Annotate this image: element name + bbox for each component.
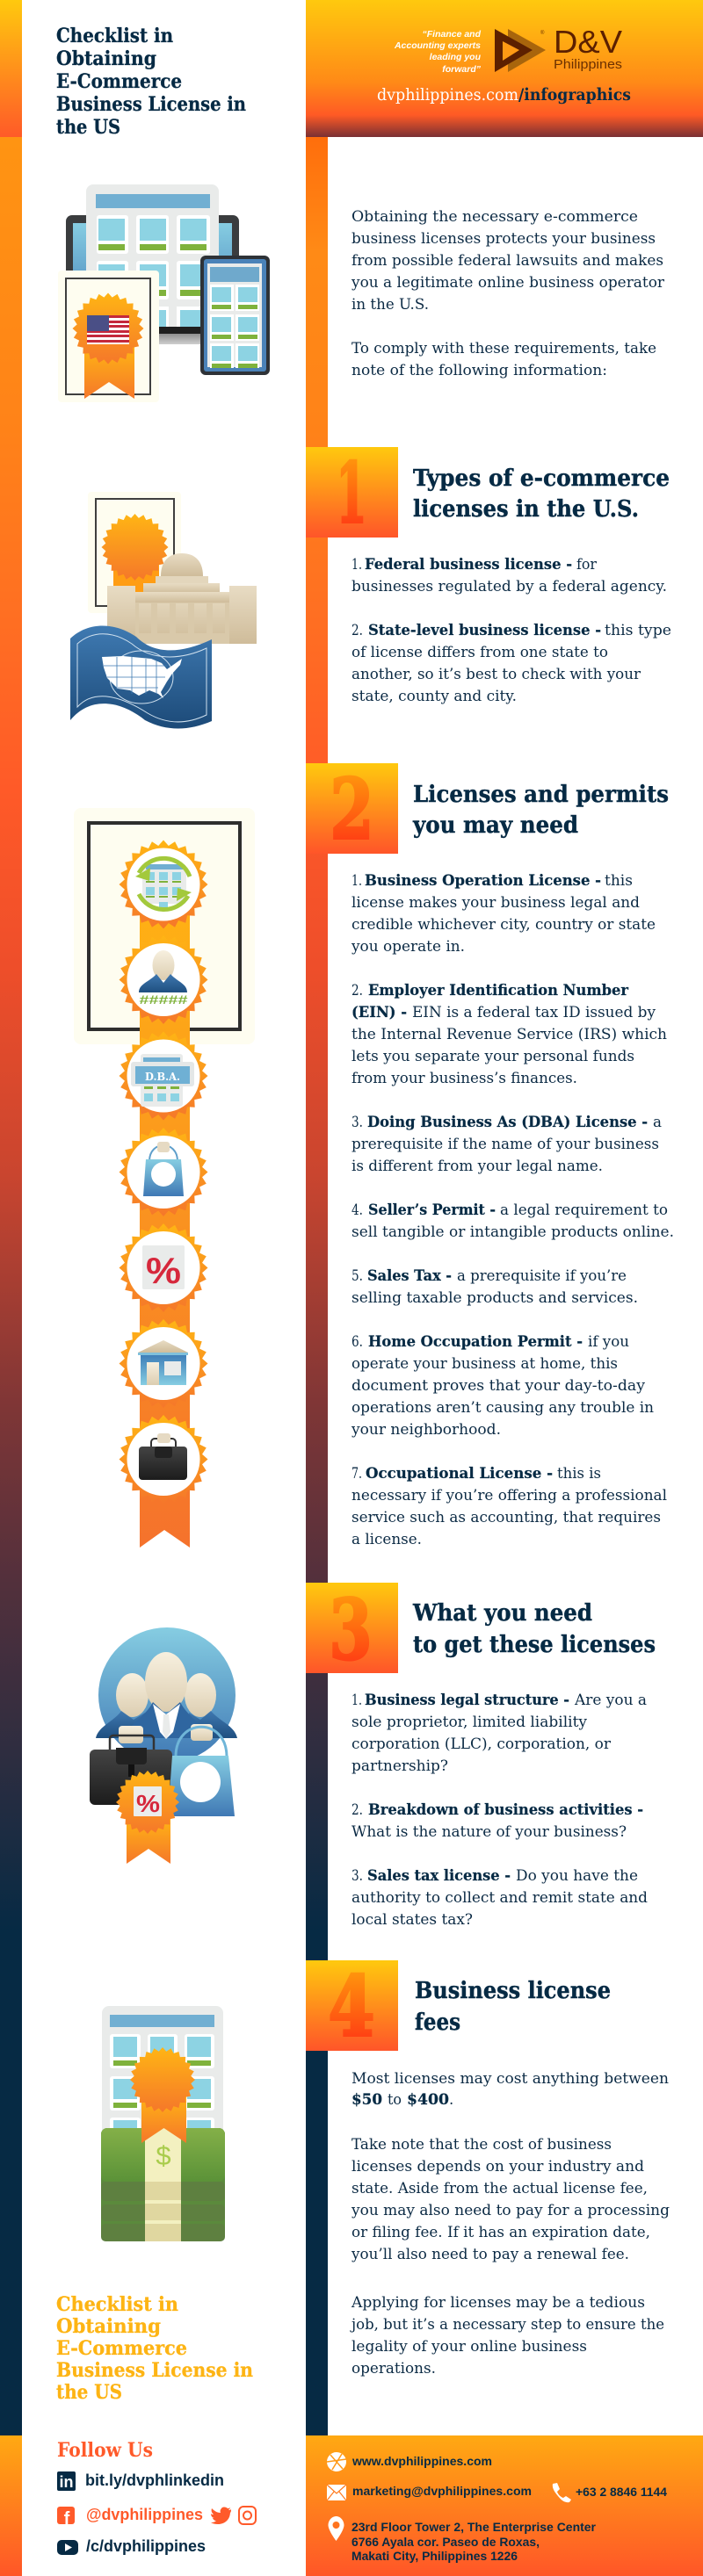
address: Makati City, Philippines 1226 xyxy=(352,2550,518,2563)
section 4 text xyxy=(350,2070,670,2377)
section 4 text: . xyxy=(449,2091,453,2108)
section 2 text: 3. xyxy=(352,1114,363,1130)
seal: doing business as xyxy=(120,1031,207,1121)
section 4 text: licenses depends on your industry and xyxy=(352,2158,644,2175)
logo mark xyxy=(495,29,546,72)
side persons xyxy=(96,1673,237,1738)
section 4 text: state. Aside from the actual license fee, xyxy=(352,2180,648,2197)
section 3 text: What is the nature of your business? xyxy=(352,1823,627,1840)
center vertical gradient bar xyxy=(306,137,328,2435)
icon: linkedin: in xyxy=(60,2473,74,2491)
heading 3 xyxy=(412,1600,656,1658)
number badge 4 xyxy=(306,1959,398,2055)
intro text: in the U.S. xyxy=(352,296,429,313)
capitol building xyxy=(107,553,257,644)
discount seal xyxy=(116,1771,179,1864)
intro text: business licenses protects your business xyxy=(352,230,656,247)
section 2 text: from your business’s finances. xyxy=(352,1070,577,1086)
section 2 text: this xyxy=(605,872,633,889)
tagline: “Finance and xyxy=(422,29,482,40)
logo wordmark: Philippines xyxy=(554,57,622,72)
money stack: $ xyxy=(156,2140,171,2171)
section 4 text: Take note that the cost of business xyxy=(352,2136,612,2153)
section 2 text: the Internal Revenue Service (IRS) which xyxy=(352,1026,667,1043)
section 3 text xyxy=(352,1692,648,1928)
heading 1 xyxy=(413,465,670,523)
intro text: note of the following information: xyxy=(352,362,607,379)
section 2 text: selling taxable products and services. xyxy=(352,1289,638,1306)
footer contact panel xyxy=(306,2435,703,2576)
section 2 text: document proves that your day-to-day xyxy=(352,1377,646,1394)
section 1 text: this type xyxy=(605,622,671,639)
icon: mail xyxy=(327,2485,346,2500)
section 2 text: 7. xyxy=(352,1465,362,1482)
section 2 text xyxy=(351,872,674,1548)
title: the US xyxy=(56,116,120,139)
blue backdrop xyxy=(98,1627,236,1763)
section 2 text: license makes your business legal and xyxy=(352,894,640,911)
section 3 text: authority to collect and remit state and xyxy=(352,1889,648,1906)
section 2 text: a legal requirement to xyxy=(500,1201,668,1218)
section 2 text: sell tangible or intangible products online. xyxy=(352,1223,674,1240)
illustration: license page, seal and money xyxy=(101,2006,225,2241)
section 4 text: legality of your online business xyxy=(352,2338,587,2355)
section 4 text: operations. xyxy=(352,2360,436,2377)
number badge 1: 1 xyxy=(336,444,367,543)
section 4 text: you may also need to pay for a processing xyxy=(351,2202,670,2219)
section 2 text: Seller’s Permit - xyxy=(368,1201,496,1218)
tablet page xyxy=(86,184,219,327)
icon: linkedin xyxy=(57,2471,76,2491)
section 2 text: Home Occupation Permit - xyxy=(368,1333,583,1350)
money stack xyxy=(101,2128,225,2241)
seal: sales tax: % xyxy=(146,1250,181,1291)
section 4 text: $50 xyxy=(352,2091,382,2108)
icon: location pin xyxy=(329,2516,344,2541)
seal: occupational license xyxy=(120,1415,207,1504)
heading 1: Types of e-commerce xyxy=(413,465,670,492)
closing title: E-Commerce xyxy=(56,2337,187,2360)
section 1 text: Federal business license - xyxy=(365,556,572,573)
section 2 text: necessary if you’re offering a professional xyxy=(352,1487,667,1504)
laptop xyxy=(66,215,239,344)
social handle: @dvphilippines xyxy=(86,2506,203,2523)
tagline: forward” xyxy=(442,64,482,75)
section 2 text: operate your business at home, this xyxy=(352,1355,618,1372)
seal: doing business as: D.B.A. xyxy=(145,1071,180,1083)
section 1 text xyxy=(352,556,671,704)
illustration: ribbon with seven license seals xyxy=(120,840,207,1548)
number badge 2 xyxy=(306,761,398,859)
certificate with flag seal xyxy=(58,271,159,402)
section 3 text: Sales tax license - xyxy=(367,1867,511,1884)
section 1 text: businesses regulated by a federal agency. xyxy=(352,578,667,595)
section 3 text: Breakdown of business activities - xyxy=(368,1801,643,1818)
section 3 text: corporation (LLC), corporation, or xyxy=(352,1735,611,1752)
section 1 text: 2. xyxy=(352,622,363,639)
section 1 text: another, so it’s best to check with your xyxy=(352,666,641,682)
section 2 text: Employer Identification Number xyxy=(368,982,628,999)
illustration: certificate, capitol and US flag xyxy=(70,492,257,729)
ribbon xyxy=(140,913,190,1548)
discount seal: % xyxy=(136,1790,160,1817)
number badge 3: 3 xyxy=(329,1581,373,1679)
icon: youtube xyxy=(57,2540,78,2555)
section 3 text: Are you a xyxy=(574,1692,647,1708)
section 2 text: Occupational License - xyxy=(366,1465,553,1482)
section 2 text: a prerequisite if you’re xyxy=(457,1267,627,1284)
address: 6766 Ayala cor. Paseo de Roxas, xyxy=(352,2536,540,2549)
heading 4 xyxy=(415,1978,611,2036)
seal: sales tax xyxy=(120,1223,207,1312)
logo wordmark xyxy=(540,24,622,72)
section 2 text: 6. xyxy=(352,1333,363,1350)
section 1 text: state, county and city. xyxy=(352,688,517,704)
illustration: laptop, tablet, phone and certificate xyxy=(58,184,270,402)
section 2 text: lets you separate your personal funds xyxy=(352,1048,634,1064)
certificate with seal xyxy=(88,492,181,613)
linkedin handle: bit.ly/dvphlinkedin xyxy=(85,2471,224,2489)
logo wordmark: ® xyxy=(540,30,545,36)
heading 2 xyxy=(412,782,669,839)
website url: /infographics xyxy=(518,85,631,105)
footer left strip xyxy=(0,2435,22,2576)
left header strip xyxy=(0,0,22,137)
section 2 text: 2. xyxy=(352,982,363,999)
icon: globe xyxy=(327,2452,346,2471)
closing title xyxy=(56,2293,253,2404)
title: Checklist in xyxy=(56,25,173,47)
title: E-Commerce xyxy=(56,70,182,93)
tagline: Accounting experts xyxy=(394,40,481,51)
illustration: framed certificate xyxy=(74,808,255,1044)
section 2 text: credible whichever city, country or state xyxy=(352,916,656,933)
icon: twitter xyxy=(211,2507,231,2524)
section 2 text: a license. xyxy=(352,1531,422,1548)
heading 4: fees xyxy=(415,2010,460,2036)
number badge 1 xyxy=(306,444,398,543)
section 1 text: 1. xyxy=(352,556,362,573)
section 2 text: EIN is a federal tax ID issued by xyxy=(412,1004,656,1021)
heading 1: licenses in the U.S. xyxy=(413,496,639,523)
section 3 text: local states tax? xyxy=(352,1911,473,1928)
section 2 text: (EIN) - xyxy=(352,1004,407,1021)
heading 2: Licenses and permits xyxy=(413,782,669,808)
briefcase xyxy=(90,1735,172,1805)
left vertical gradient bar xyxy=(0,137,22,2435)
intro text xyxy=(351,208,664,379)
address xyxy=(352,2521,597,2563)
intro text: Obtaining the necessary e-commerce xyxy=(352,208,638,225)
section 3 text: 3. xyxy=(352,1867,363,1884)
title xyxy=(56,25,246,139)
heading 2: you may need xyxy=(412,812,578,839)
hands xyxy=(119,1724,213,1743)
intro text: from possible federal lawsuits and makes xyxy=(352,252,663,269)
follow us block xyxy=(57,2439,256,2555)
seal: business operation license xyxy=(120,840,207,929)
logo wordmark: D&V xyxy=(554,24,622,60)
tagline xyxy=(394,29,482,75)
section 4 text: Most licenses may cost anything between xyxy=(352,2070,669,2087)
heading 3: What you need xyxy=(412,1600,592,1627)
section 3 text: sole proprietor, limited liability xyxy=(352,1714,588,1730)
section 3 text: 2. xyxy=(352,1801,363,1818)
section 3 text: partnership? xyxy=(352,1757,448,1774)
closing title: the US xyxy=(56,2381,122,2404)
address: 23rd Floor Tower 2, The Enterprise Center xyxy=(352,2521,597,2534)
section 4 text: you’ll also need to pay a renewal fee. xyxy=(351,2246,629,2262)
section 2 text: service such as accounting, that requires xyxy=(352,1509,661,1526)
email: marketing@dvphilippines.com xyxy=(352,2485,532,2498)
seal: employer identification number xyxy=(120,935,207,1024)
heading 3: to get these licenses xyxy=(413,1632,656,1658)
website: www.dvphilippines.com xyxy=(352,2455,492,2468)
section 2 text: you operate in. xyxy=(351,938,465,955)
phone number: +63 2 8846 1144 xyxy=(576,2486,668,2499)
section 3 text: Business legal structure - xyxy=(365,1692,569,1708)
section 2 text: prerequisite if the name of your business xyxy=(352,1136,659,1152)
website url: dvphilippines.com xyxy=(377,85,518,105)
section 4 text: job, but it’s a necessary step to ensure the xyxy=(350,2316,664,2333)
section 2 text: 5. xyxy=(352,1267,363,1284)
section 4 text: or filing fee. If it has an expiration date, xyxy=(352,2224,650,2240)
shopping bag xyxy=(168,1727,235,1816)
number badge 3 xyxy=(306,1581,398,1679)
intro text: you a legitimate online business operator xyxy=(351,274,664,291)
section 2 text: a xyxy=(653,1114,662,1130)
icon: phone xyxy=(553,2483,571,2502)
phone xyxy=(200,256,270,375)
center person xyxy=(123,1652,209,1739)
section 2 text: operations aren’t causing any trouble in xyxy=(352,1399,654,1416)
seal: home occupation permit xyxy=(120,1319,207,1408)
section 1 text: of license differs from one state to xyxy=(352,644,608,660)
title: Business License in xyxy=(56,93,246,116)
license page xyxy=(102,2006,223,2134)
section 3 text: 1. xyxy=(352,1692,362,1708)
heading 4: Business license xyxy=(415,1978,611,2004)
section 1 text: for xyxy=(576,556,597,573)
section 4 text: to xyxy=(388,2091,402,2108)
section 1 text: State-level business license - xyxy=(368,622,601,639)
icon: facebook: f xyxy=(64,2509,70,2529)
illustration: business team with briefcase, bag and seal xyxy=(90,1627,237,1864)
section 3 text: Do you have the xyxy=(516,1867,638,1884)
section 2 text: Sales Tax - xyxy=(367,1267,452,1284)
section 2 text: 1. xyxy=(352,872,362,889)
follow us heading: Follow Us xyxy=(57,2439,153,2462)
closing title: Business License in xyxy=(56,2359,253,2382)
closing title: Checklist in xyxy=(56,2293,178,2316)
section 2 text: is different from your legal name. xyxy=(352,1158,603,1174)
ribbon and seal xyxy=(130,2047,195,2143)
section 2 text: this is xyxy=(557,1465,601,1482)
section 2 text: Business Operation License - xyxy=(365,872,601,889)
website url xyxy=(377,85,631,105)
header banner with logo xyxy=(306,0,703,137)
number badge 4: 4 xyxy=(329,1959,374,2055)
title: Obtaining xyxy=(56,47,156,70)
section 4 text: Applying for licenses may be a tedious xyxy=(351,2294,645,2311)
section 4 text: $400 xyxy=(407,2091,449,2108)
icon: instagram xyxy=(239,2507,256,2524)
intro text: To comply with these requirements, take xyxy=(352,340,656,357)
seal: employer identification number: ##### xyxy=(139,992,188,1007)
section 2 text: Doing Business As (DBA) License - xyxy=(367,1114,648,1130)
section 2 text: your neighborhood. xyxy=(351,1421,501,1438)
closing title: Obtaining xyxy=(56,2315,161,2338)
tagline: leading you xyxy=(430,52,482,62)
section 2 text: 4. xyxy=(352,1201,363,1218)
flag with US map xyxy=(70,625,212,729)
youtube handle: /c/dvphilippines xyxy=(86,2537,206,2555)
section 2 text: if you xyxy=(588,1333,629,1350)
seal: seller's permit xyxy=(120,1128,207,1216)
number badge 2: 2 xyxy=(330,761,374,859)
icon: facebook xyxy=(57,2507,75,2529)
